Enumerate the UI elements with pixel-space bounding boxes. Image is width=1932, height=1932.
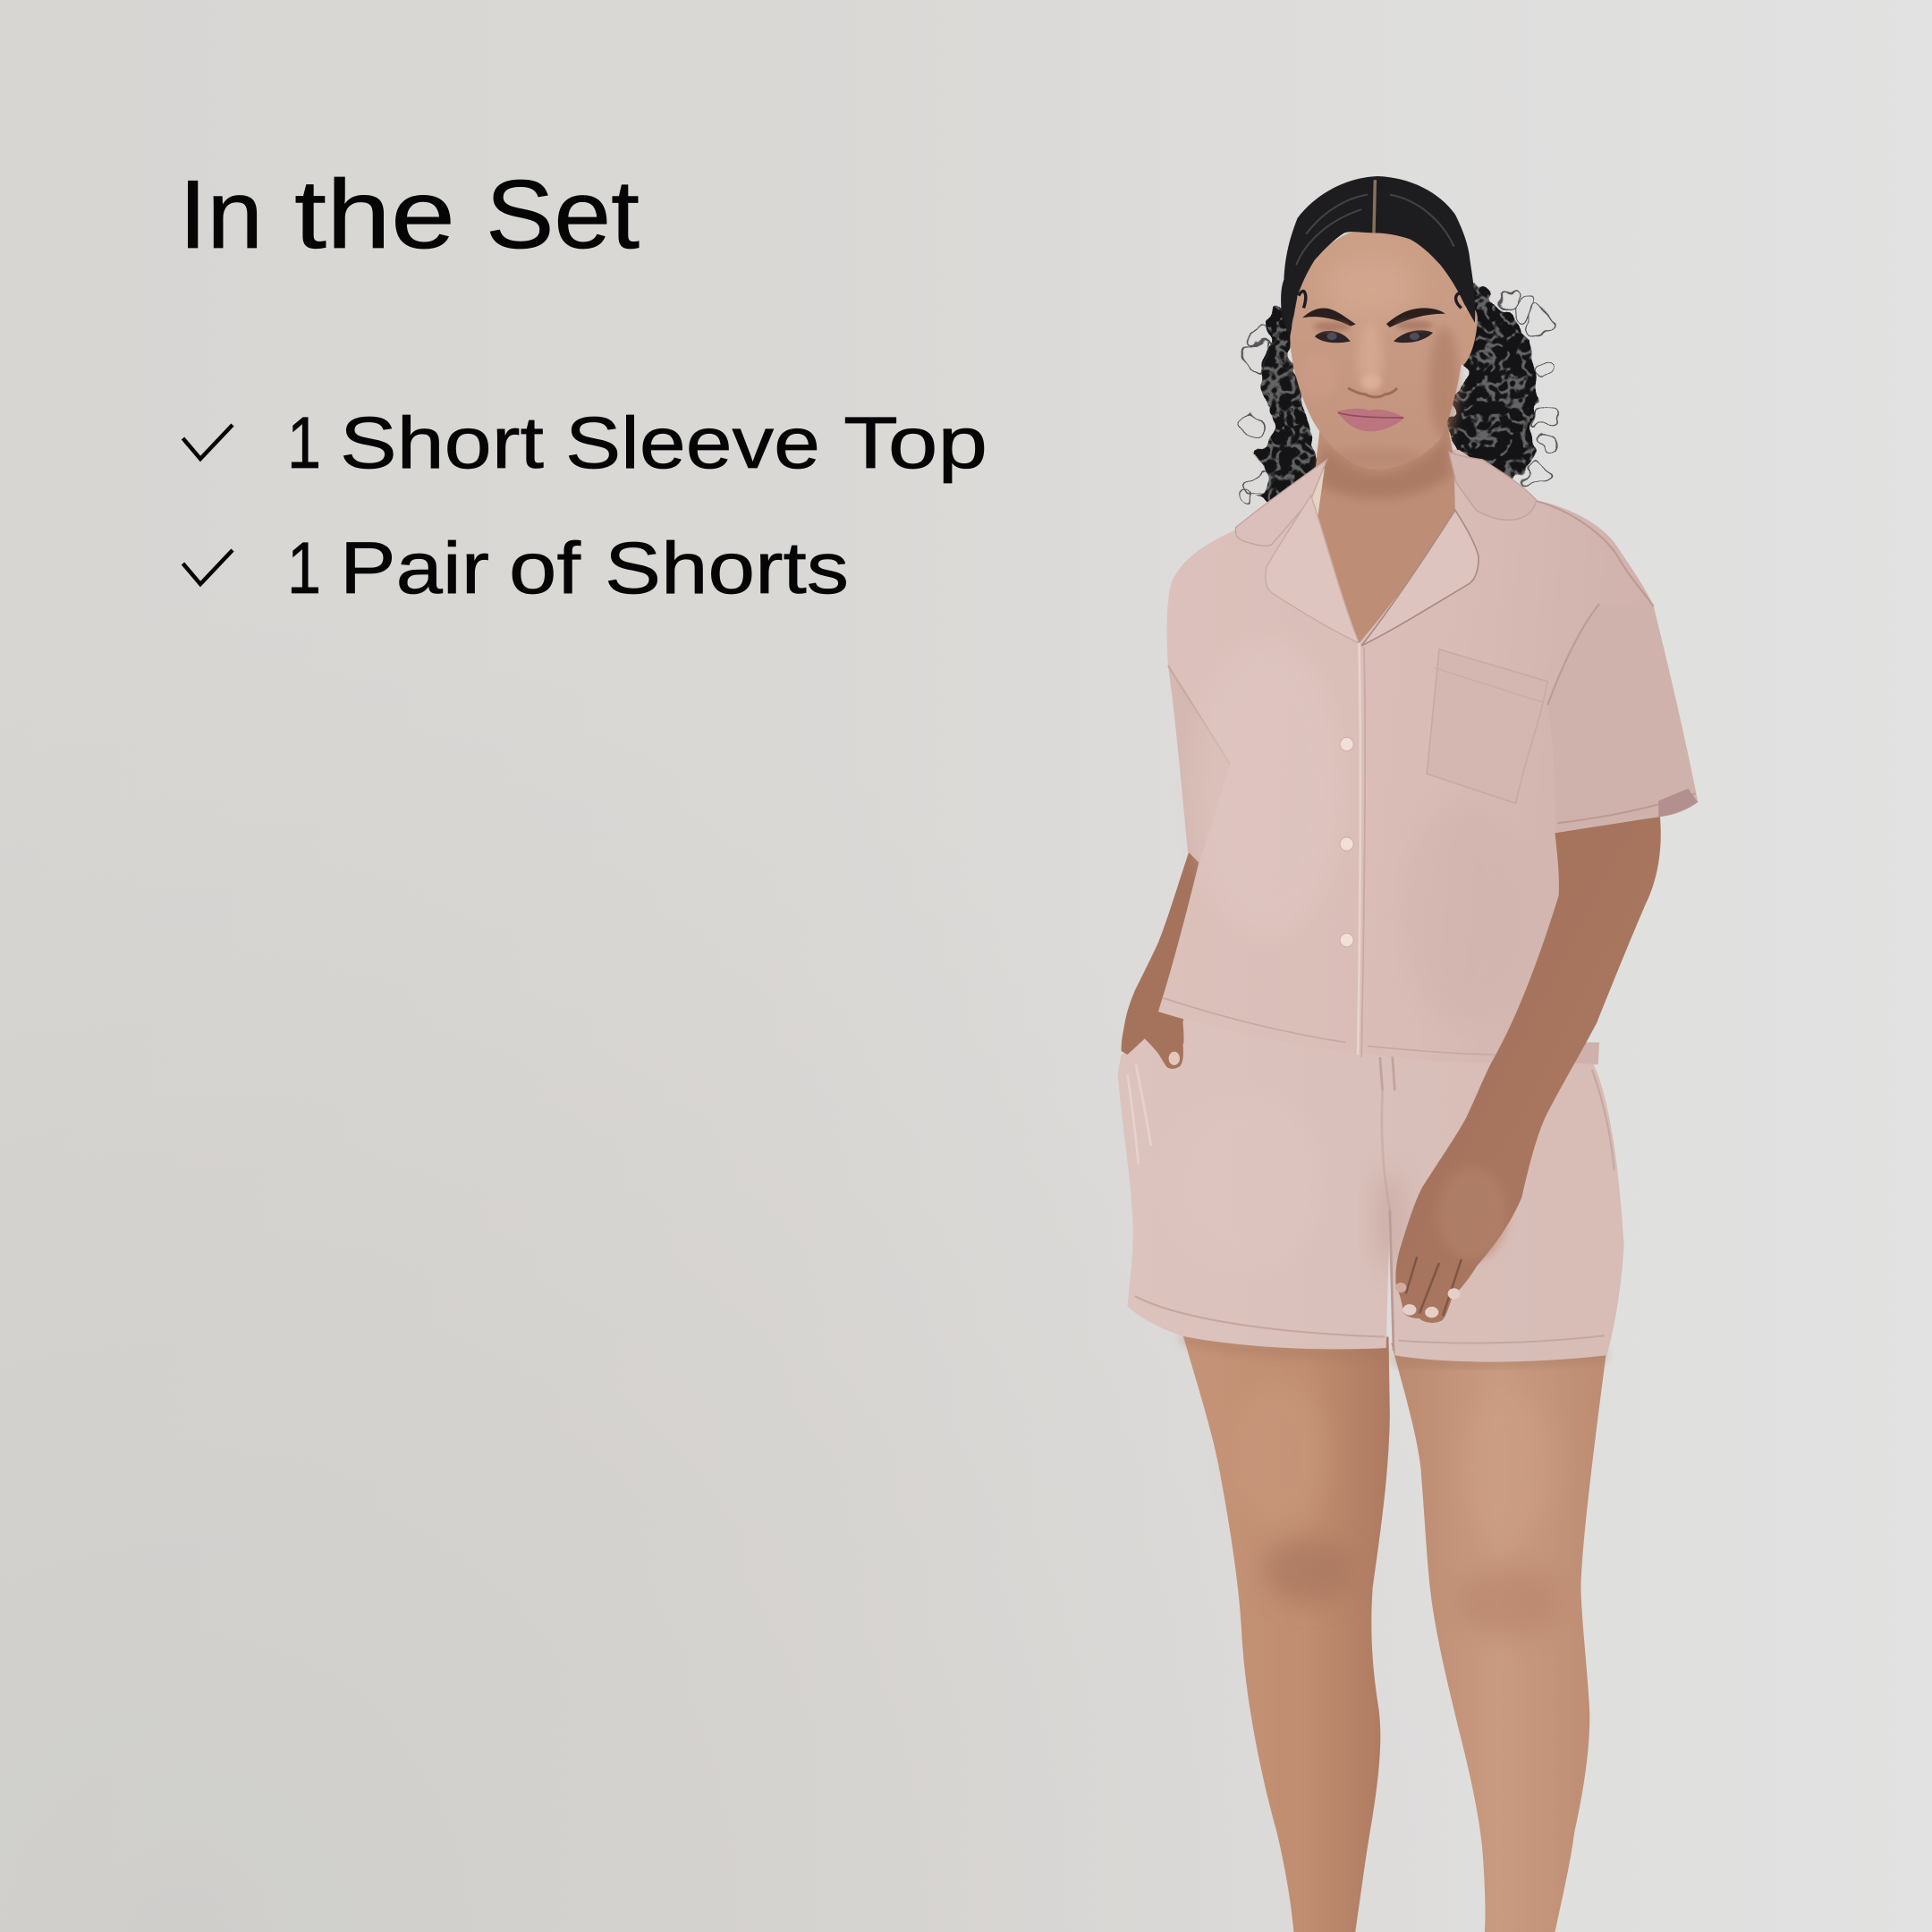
label: short sleeve top: Short [340,402,544,484]
lapel left [1266,496,1359,643]
title: In [179,160,263,269]
skin of neck and chest [1306,407,1455,643]
item: shorts [182,528,849,609]
dense mass [1259,290,1538,505]
icon: check mark [182,425,233,459]
label: pair of shorts: 1 [287,528,321,609]
mottled curls [1259,290,1538,505]
shorts [1117,1016,1624,1362]
ear [1456,308,1478,365]
right sleeve [1547,604,1698,833]
left arm and hand in pocket [1122,848,1214,1069]
eyes [1315,330,1433,343]
title: Set [486,160,640,269]
shirt body and sleeves [1158,450,1698,1063]
label: short sleeve top: Top [843,402,987,484]
placket [1358,643,1360,1055]
hem stitching [1163,998,1496,1055]
legs [1182,1331,1606,1932]
title: the [294,160,455,269]
collar left [1235,460,1327,546]
item: short sleeve top [182,402,987,484]
label: pair of shorts: of [509,528,580,609]
left sleeve lower [1168,665,1230,862]
label: pair of shorts: Shorts [605,528,849,609]
lips [1337,409,1404,431]
shirt [1158,407,1698,1063]
curly hair [1238,287,1557,508]
stray loops [1238,287,1557,508]
sleek hair cap [1281,176,1475,335]
lapel right [1361,510,1479,646]
nose [1348,388,1397,397]
icon: check mark [182,550,233,584]
label: short sleeve top: 1 [287,402,321,484]
collar right [1449,453,1537,520]
pocket [1427,649,1547,803]
buttons [1340,737,1353,947]
label: pair of shorts: Pair [340,528,489,609]
right arm and hand on thigh [1395,813,1661,1323]
model photo [1117,176,1698,1932]
label: short sleeve top: Sleeve [565,402,820,484]
checklist [182,402,987,609]
face [1290,228,1478,470]
eyebrows [1305,309,1443,326]
